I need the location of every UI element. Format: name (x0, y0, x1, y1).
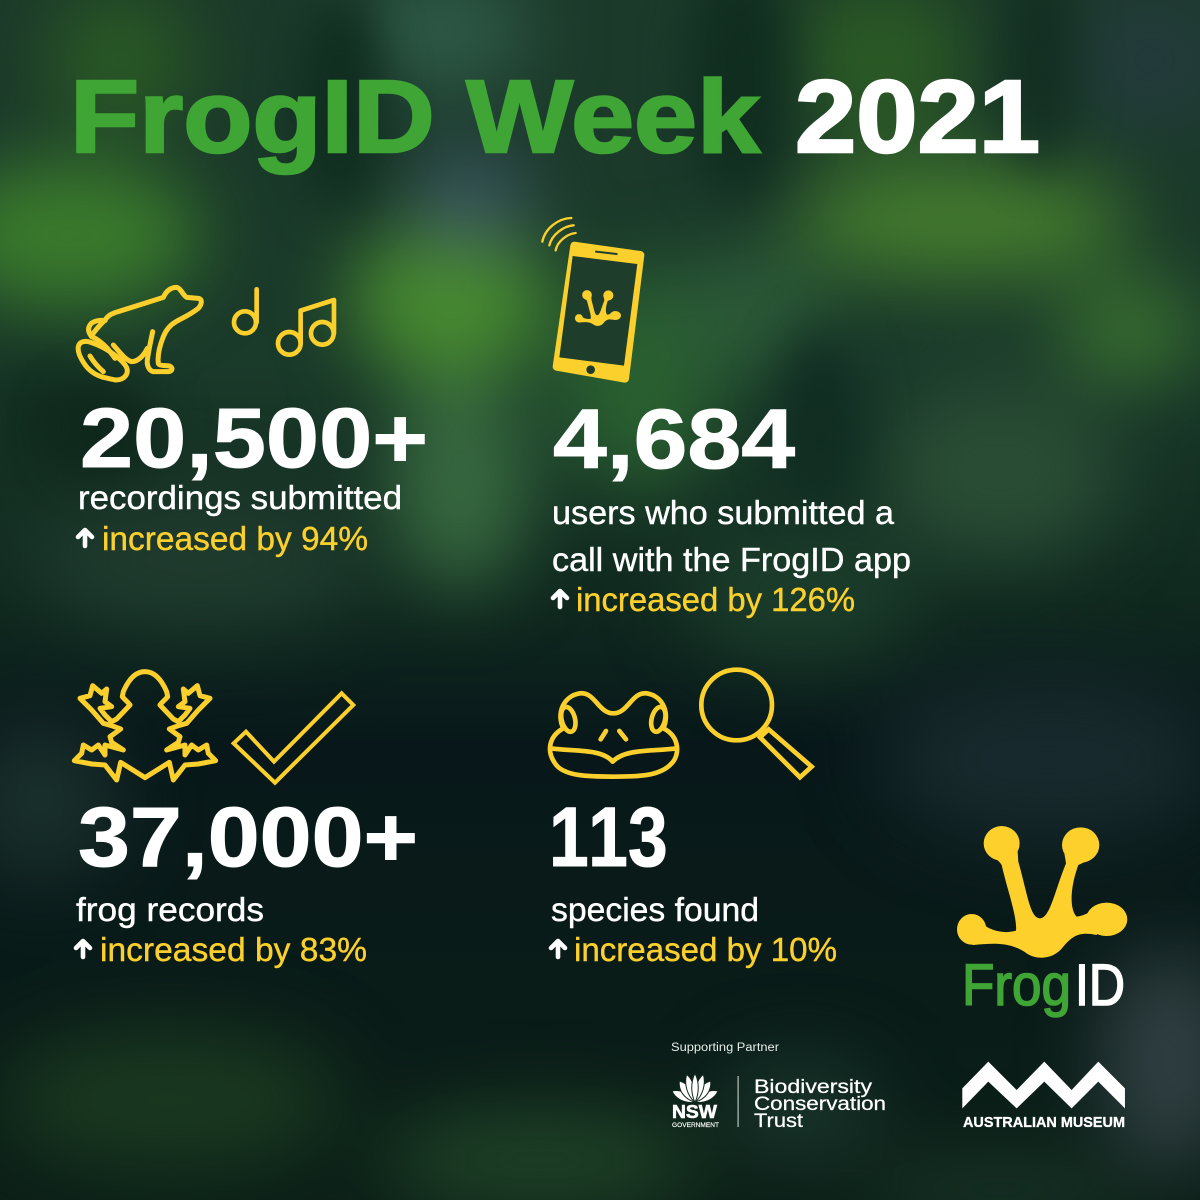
logo: Australian Museum (962, 1062, 1125, 1131)
logo: NSW Government Biodiversity Conservation Trust: NSW (672, 1102, 717, 1122)
title (70, 59, 1040, 174)
icon: phone with frog foot (542, 218, 640, 379)
title: FrogID Week (70, 59, 761, 174)
panel: species found (549, 670, 837, 968)
label: recordings submitted: recordings submitted (78, 479, 402, 516)
logo: FrogID (957, 826, 1127, 1018)
logo: FrogID: Frog (962, 953, 1071, 1018)
panel: recordings submitted (78, 287, 428, 557)
title: 2021 (795, 59, 1040, 174)
increase note: increased by 10% (574, 931, 837, 968)
increase note: increased by 94% (102, 520, 368, 557)
logo: FrogID: ID (1075, 953, 1125, 1018)
statistic: 4,684: 4,684 (553, 392, 795, 486)
logo: NSW Government Biodiversity Conservation Trust: Biodiversity (754, 1076, 872, 1098)
icon: calling frog with music notes (78, 287, 334, 380)
logo: NSW Government Biodiversity Conservation Trust: Trust (754, 1110, 804, 1132)
panel: app users (542, 218, 911, 618)
icon: frog top view with check mark (74, 672, 353, 783)
icon: waratah flower (672, 1073, 718, 1102)
statistic: 113: 113 (549, 789, 668, 884)
increase note: increased by 83% (100, 931, 367, 968)
logo: NSW Government Biodiversity Conservation Trust: GOVERNMENT (672, 1122, 719, 1129)
panel: frog records (74, 672, 418, 968)
label: frog records: frog records (76, 891, 264, 928)
logo: NSW Government Biodiversity Conservation Trust (672, 1073, 886, 1132)
statistic: 37,000+: 37,000+ (78, 790, 418, 884)
supporting partner label: Supporting Partner (671, 1042, 779, 1054)
increase note: increased by 126% (576, 581, 855, 618)
icon: frog face with magnifying glass (550, 670, 812, 777)
logo: Australian Museum: AUSTRALIAN MUSEUM (963, 1115, 1125, 1131)
logo: NSW Government Biodiversity Conservation Trust: Conservation (754, 1093, 886, 1115)
label: users who submitted a call (552, 494, 911, 578)
label: users who submitted a call: users who submitted a (552, 494, 895, 531)
label: users who submitted a call: call with the FrogID app (552, 541, 911, 578)
statistic: 20,500+: 20,500+ (80, 391, 428, 485)
label: species found: species found (551, 891, 759, 928)
